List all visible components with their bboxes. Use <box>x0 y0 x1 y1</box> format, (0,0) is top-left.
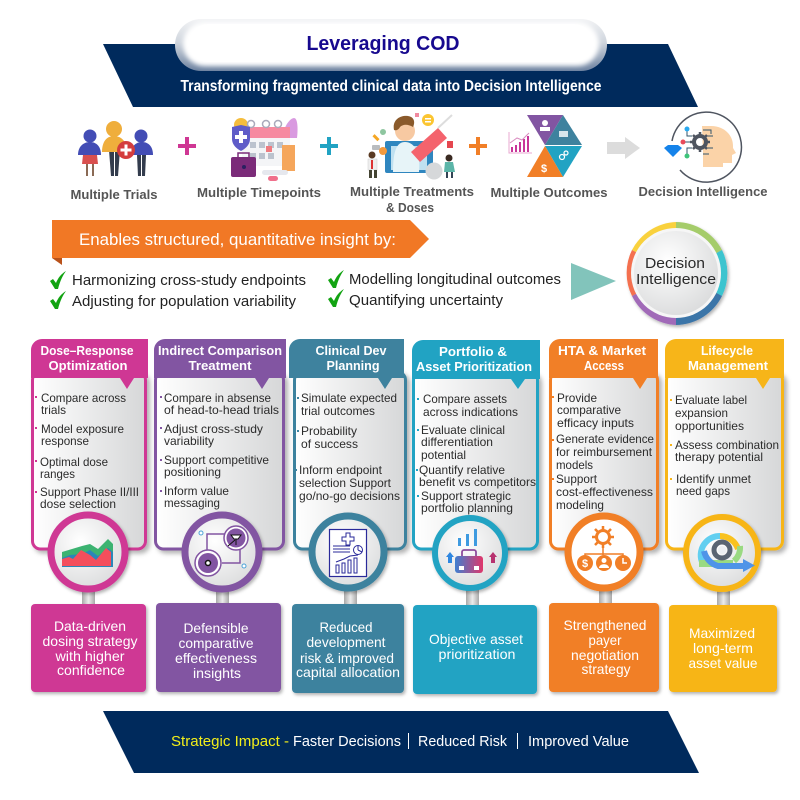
icon: multiple treatments and doses <box>368 113 455 180</box>
outcome: reduced development risk: development <box>306 634 386 650</box>
label: multiple trials: Multiple Trials <box>70 187 158 202</box>
bullets: Inform endpoint <box>299 463 383 477</box>
bullets: comparative <box>557 403 621 417</box>
bullets: Inform value <box>164 484 229 498</box>
outcome: reduced development risk: risk & improved <box>300 650 394 666</box>
plus: orange <box>469 137 487 155</box>
outcome: maximized long-term asset value: Maximized <box>689 625 755 641</box>
panel: lifecycle management <box>665 339 784 549</box>
label: multiple treatments and doses: Multiple Treatments <box>350 184 474 199</box>
plus: teal <box>320 137 338 155</box>
bullets: Support competitive <box>164 453 269 467</box>
top banner <box>103 19 698 107</box>
label: multiple treatments and doses <box>350 184 474 215</box>
bullets: benefit vs competitors <box>419 475 536 489</box>
bullets: opportunities <box>675 419 744 433</box>
bullets: Identify unmet <box>676 472 752 486</box>
bullets: therapy potential <box>675 450 763 464</box>
check item: adjusting: Adjusting for population variability <box>72 293 296 310</box>
outcome: strengthened payer negotiation: negotiation <box>571 647 639 663</box>
header: Optimization <box>48 359 128 373</box>
bullets: portfolio planning <box>421 501 513 515</box>
header: Portfolio & <box>439 345 507 359</box>
bullets: Generate evidence <box>556 432 654 446</box>
outcome: defensible comparative effectiveness: effectiveness <box>175 650 257 666</box>
check item: harmonizing: Harmonizing cross-study endpoints <box>72 272 306 289</box>
bottom banner: strategic impact <box>103 711 699 773</box>
bullets: dose selection <box>40 497 116 511</box>
panel: clinical dev planning <box>289 339 406 549</box>
decision intelligence ring <box>627 222 727 325</box>
outcome: objective asset prioritization: prioritization <box>438 646 516 662</box>
header <box>412 340 540 389</box>
bullets: need gaps <box>676 484 730 498</box>
header: Access <box>584 359 624 373</box>
arrow: teal triangle <box>571 263 616 300</box>
bullets: models <box>556 458 593 472</box>
arrow: grey <box>607 137 640 159</box>
bullets: Support Phase II/III <box>40 485 139 499</box>
outcome: data-driven dosing <box>31 604 146 692</box>
header <box>289 339 404 389</box>
bullets: messaging <box>164 496 220 510</box>
icon: toolbox with bars <box>435 518 505 588</box>
bottom banner: strategic impact: Faster Decisions <box>293 734 401 750</box>
bottom banner: strategic impact: Reduced Risk <box>418 734 508 750</box>
bullets: Evaluate clinical <box>421 423 505 437</box>
icon: lifecycle loop <box>686 517 758 589</box>
bullets <box>35 391 139 511</box>
icon: report document <box>312 516 384 588</box>
outcome: defensible comparative effectiveness: insights <box>193 665 241 681</box>
outcome: data-driven dosing: with higher <box>54 648 125 664</box>
icon: multiple trials <box>78 121 153 176</box>
header: Indirect Comparison <box>158 344 282 358</box>
outcome: maximized long-term asset value: long-term <box>693 640 753 656</box>
stem <box>344 590 357 606</box>
bullets: Compare across <box>41 391 126 405</box>
bullets: Provide <box>557 391 597 405</box>
bullets: modeling <box>556 498 604 512</box>
bullets: potential <box>421 448 466 462</box>
stem <box>466 590 479 606</box>
bullets: cost-effectiveness <box>556 485 653 499</box>
label: multiple treatments and doses: & Doses <box>386 200 434 215</box>
outcome: strengthened payer negotiation: payer <box>588 632 622 648</box>
decision intelligence ring: Decision <box>645 255 705 272</box>
bottom banner: strategic impact: Strategic Impact - <box>171 734 289 750</box>
outcome: strengthened payer negotiation: Strengthened <box>564 617 646 633</box>
outcome: reduced development risk: Reduced <box>320 619 372 635</box>
outcome: reduced development risk <box>292 604 404 693</box>
bullets: Simulate expected <box>301 391 397 405</box>
plus: pink <box>178 137 196 155</box>
header: Planning <box>326 359 380 373</box>
bullets <box>160 391 279 510</box>
outcome: maximized long-term asset value: asset value <box>688 655 758 671</box>
bullets: differentiation <box>421 435 493 449</box>
stem <box>599 590 612 606</box>
header: Clinical Dev <box>316 344 387 358</box>
icon: multiple outcomes <box>509 115 582 177</box>
bullets: efficacy inputs <box>557 416 634 430</box>
bullets: selection Support <box>299 476 392 490</box>
bullets: Assess combination <box>675 438 779 452</box>
bullets: Adjust cross-study <box>164 422 263 436</box>
bullets: Compare assets <box>423 392 507 406</box>
title pill: Leveraging COD <box>306 33 460 55</box>
bullets: Support <box>556 472 598 486</box>
header: Asset Prioritization <box>416 360 532 374</box>
panel: indirect comparison treatment <box>154 339 286 549</box>
header: HTA & Market <box>558 344 647 358</box>
bullets: go/no-go decisions <box>299 489 400 503</box>
bullets: of success <box>301 437 358 451</box>
icon: decision intelligence <box>664 112 741 182</box>
icon: gear hierarchy <box>568 516 640 588</box>
bullets <box>670 393 779 498</box>
bullets: expansion <box>675 406 728 420</box>
bullets: Model exposure <box>41 422 124 436</box>
bullets: trials <box>41 403 66 417</box>
outcome: strengthened payer negotiation: strategy <box>582 661 630 677</box>
panel: hta and market access <box>549 339 658 549</box>
banner subtitle: Transforming fragmented clinical data into Decision Intelligence <box>180 78 602 95</box>
bullets: variability <box>164 434 214 448</box>
icon: multiple outcomes: $ <box>541 163 547 175</box>
panel: portfolio and asset prioritization <box>412 340 540 549</box>
checklist <box>50 270 561 310</box>
bullets <box>295 391 400 503</box>
decision intelligence ring: Intelligence <box>636 271 716 288</box>
header: Lifecycle <box>701 344 753 358</box>
orange arrow banner <box>52 220 429 265</box>
bullets: response <box>41 434 89 448</box>
bullets: positioning <box>164 465 221 479</box>
bullets: Quantify relative <box>419 463 505 477</box>
outcome: maximized long-term asset value <box>669 605 777 692</box>
icon: network <box>185 515 259 589</box>
outcome: objective asset prioritization: Objective asset <box>429 631 523 647</box>
outcome: data-driven dosing: confidence <box>57 662 125 678</box>
stem <box>216 590 229 606</box>
header <box>31 339 148 389</box>
label: multiple outcomes: Multiple Outcomes <box>490 185 608 200</box>
bullets: of head-to-head trials <box>164 403 279 417</box>
header: Treatment <box>188 359 252 373</box>
icon: area chart <box>51 515 125 589</box>
panel: dose-response optimization <box>31 339 148 549</box>
bullets: Compare in absense <box>164 391 271 405</box>
icon: gear hierarchy: $ <box>582 558 588 570</box>
outcome: data-driven dosing: dosing strategy <box>42 633 138 649</box>
outcome: defensible comparative effectiveness: comparative <box>178 635 254 651</box>
bullets <box>416 392 536 515</box>
bullets: for reimbursement <box>556 445 653 459</box>
bullets: Probability <box>301 424 357 438</box>
bullets: Optimal dose <box>40 455 108 469</box>
header: Management <box>688 359 769 373</box>
outcome: defensible comparative effectiveness: Defensible <box>184 620 249 636</box>
header <box>549 339 658 389</box>
header <box>665 339 784 389</box>
outcome: data-driven dosing: Data-driven <box>54 618 126 634</box>
orange arrow banner: Enables structured, quantitative insight by: <box>79 230 396 249</box>
bullets: Support strategic <box>421 489 511 503</box>
label: multiple timepoints: Multiple Timepoints <box>197 185 321 200</box>
stem <box>717 590 730 606</box>
stem <box>82 590 95 606</box>
title pill <box>175 19 607 71</box>
check item: quantifying: Quantifying uncertainty <box>349 292 504 309</box>
label: decision intelligence: Decision Intelligence <box>638 184 768 199</box>
bottom banner: strategic impact: Improved Value <box>528 734 629 750</box>
bullets: across indications <box>423 405 518 419</box>
outcome: strengthened payer negotiation <box>549 603 659 692</box>
bullets <box>552 391 654 512</box>
bullets: trial outcomes <box>301 404 375 418</box>
outcome: objective asset prioritization <box>413 605 537 694</box>
header <box>154 339 286 389</box>
bullets: ranges <box>40 467 75 481</box>
header: Dose–Response <box>40 344 134 358</box>
outcome: defensible comparative effectiveness <box>156 603 281 692</box>
icon: multiple timepoints <box>231 118 298 181</box>
outcome: reduced development risk: capital allocation <box>296 664 400 680</box>
check item: modelling: Modelling longitudinal outcomes <box>349 271 561 288</box>
bullets: Evaluate label <box>675 393 747 407</box>
